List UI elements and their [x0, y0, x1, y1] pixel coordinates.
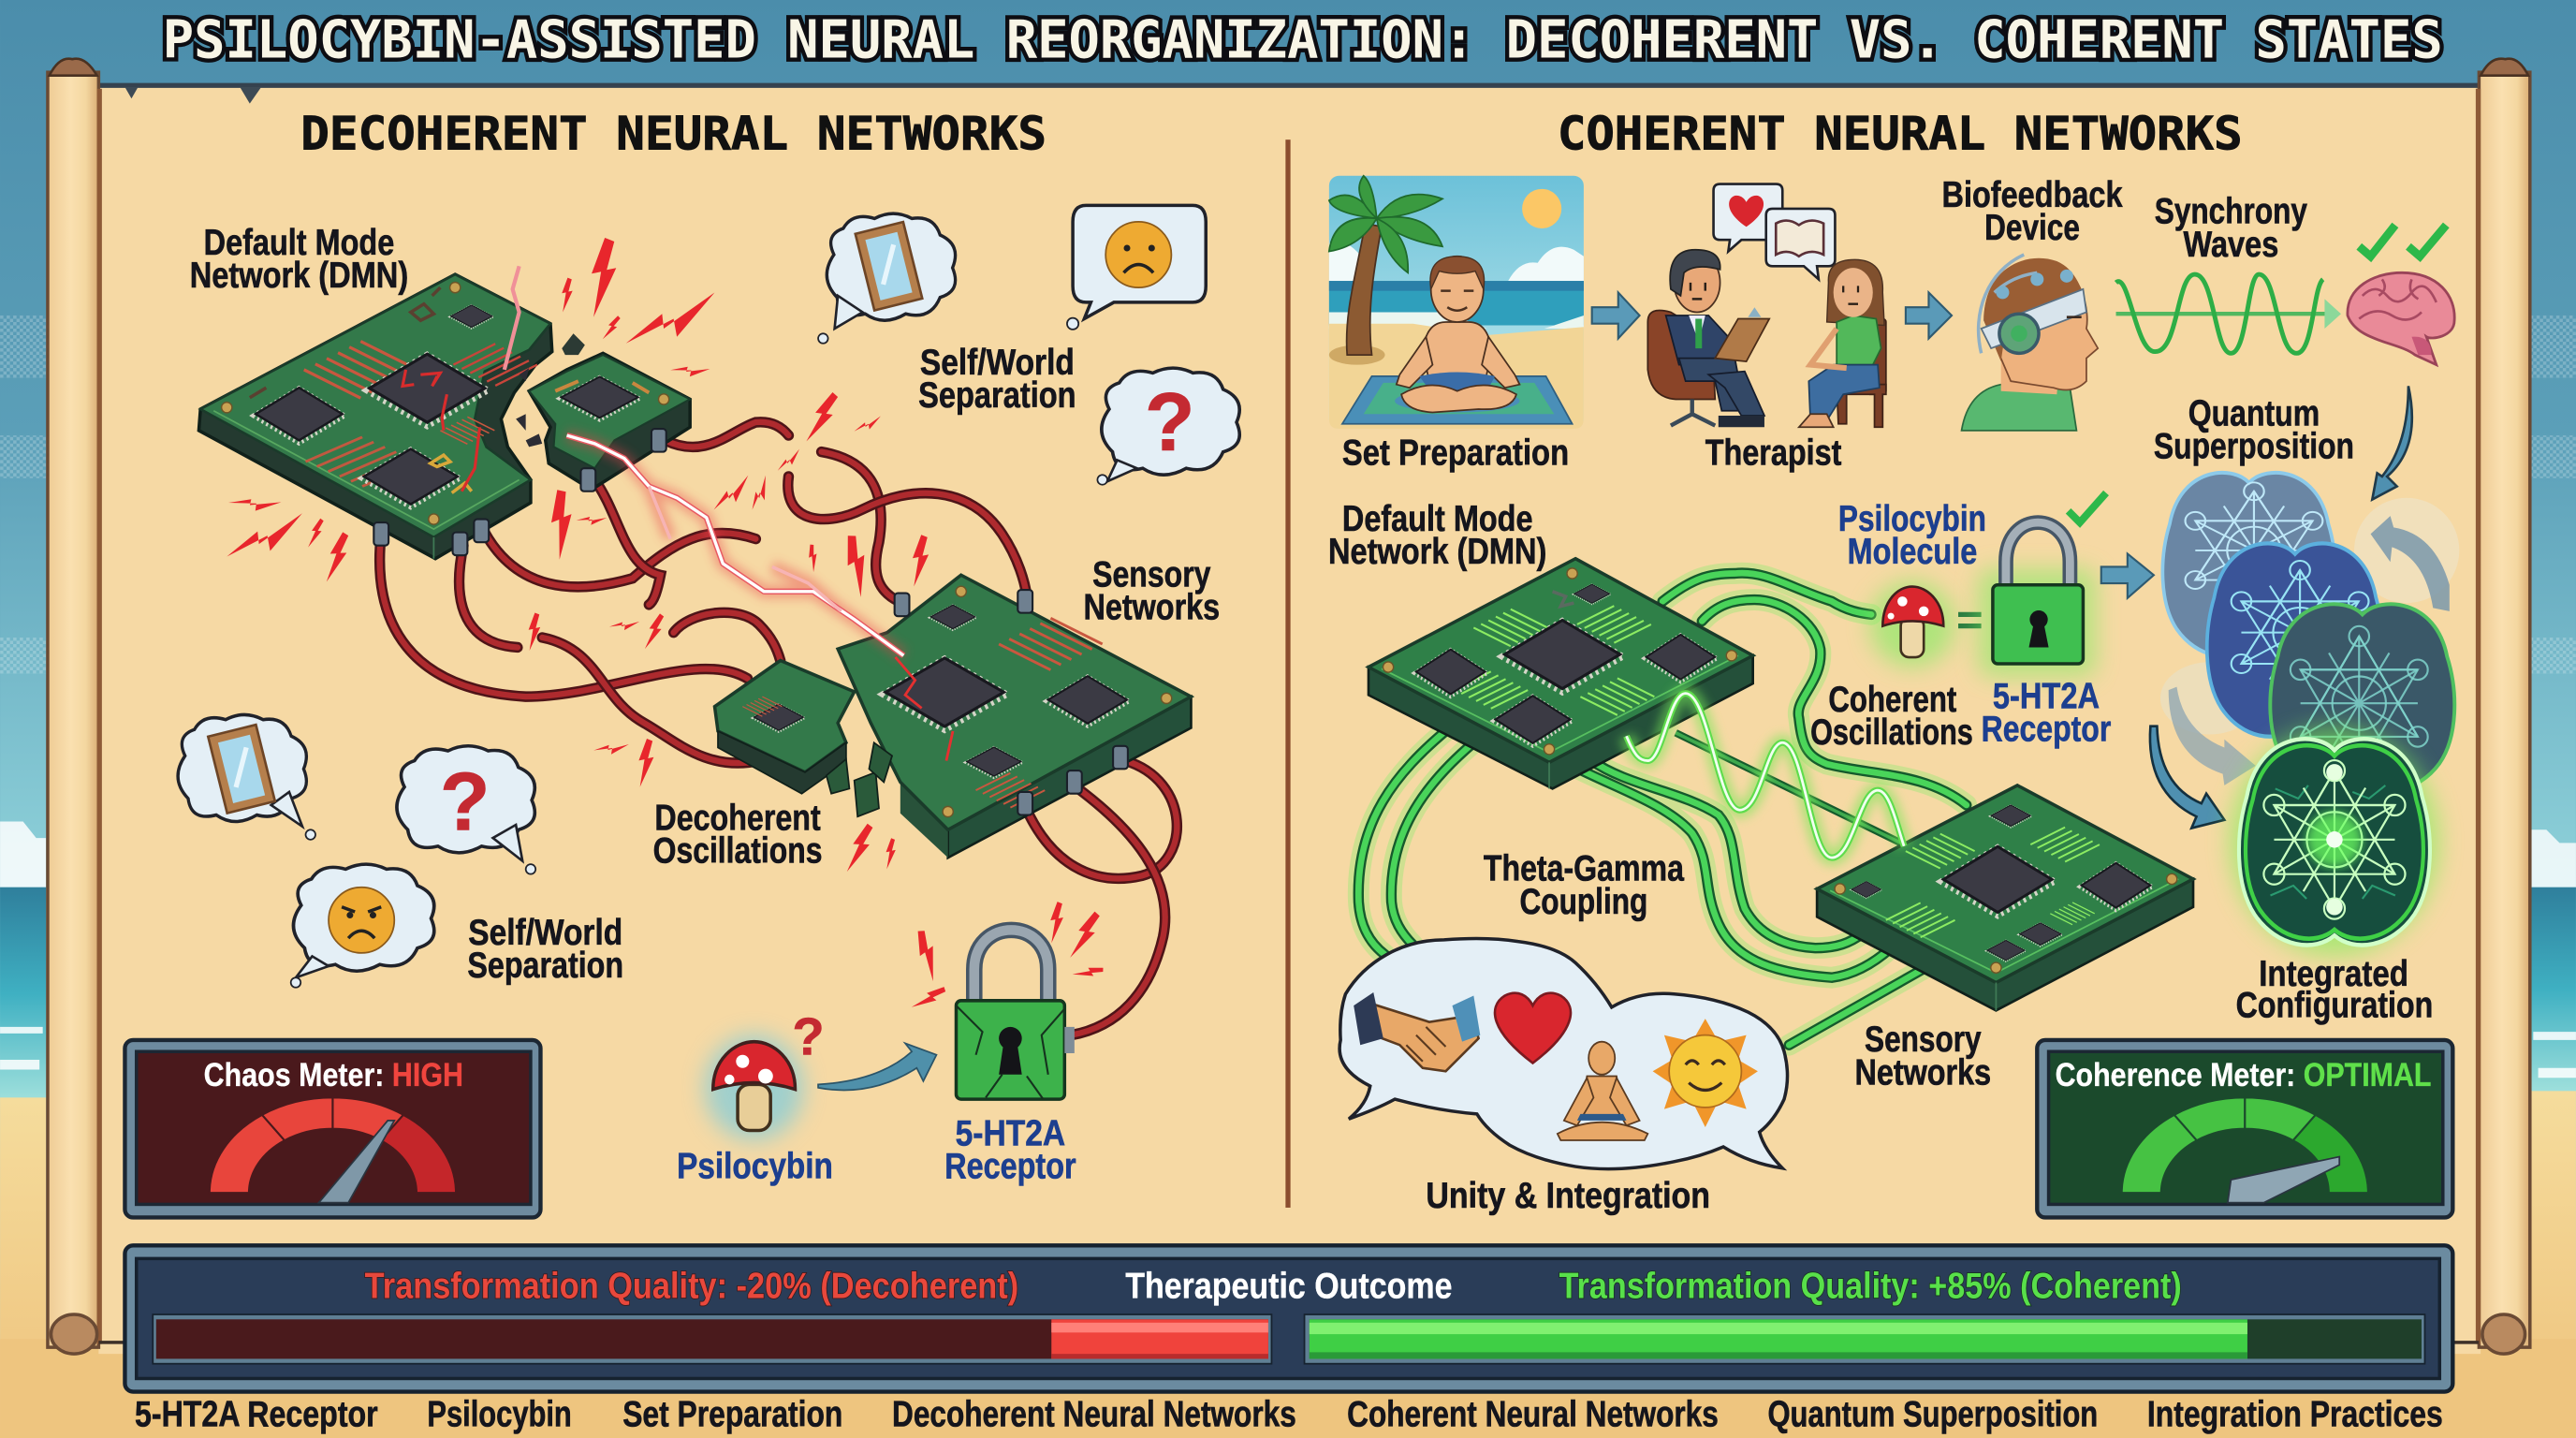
speech bubble: unity and integration: [1339, 938, 1788, 1169]
thought bubble: question mark: ?: [1145, 376, 1194, 468]
label: default mode network: [1328, 499, 1546, 572]
label: default mode network: Network (DMN): [190, 256, 408, 296]
label: default mode network: Network (DMN): [1328, 532, 1546, 572]
psilocybin mushroom: ?: [792, 1007, 825, 1066]
label: self/world separation, lower: Separation: [467, 946, 623, 986]
lock: 5-HT2A receptor open: [1978, 522, 2096, 677]
label: biofeedback device: [1942, 175, 2123, 248]
thought bubble: mirror, lower: [178, 714, 315, 840]
therapeutic outcome bar: [124, 1245, 2452, 1392]
label: default mode network: Default Mode: [1342, 499, 1532, 539]
label: sensory networks: [1854, 1020, 1991, 1093]
arrow: [1906, 292, 1952, 339]
label: 5-HT2A receptor: [1982, 676, 2111, 750]
thought bubble: question mark: [1097, 368, 1239, 485]
icon: green checks: [2359, 225, 2446, 257]
label: integrated configuration: [2236, 954, 2433, 1025]
icon: smiling sun: [1653, 1019, 1758, 1127]
meter label: Coherence Meter: OPTIMAL: [2056, 1057, 2431, 1093]
speech bubble: sad face: [1067, 205, 1206, 330]
bottom legend terms: Psilocybin: [427, 1394, 572, 1434]
coherent oscillation wave: [1627, 694, 1904, 858]
integrated configuration brain: [2230, 726, 2439, 956]
arrow: [2101, 553, 2154, 598]
gauge needle: [2228, 1157, 2339, 1203]
label: coherent oscillations: Coherent: [1828, 680, 1956, 720]
label: quantum superposition: [2154, 394, 2354, 467]
circuit board: sensory networks, broken: [714, 575, 1191, 858]
curved arrow to integrated brain: [2150, 726, 2224, 829]
label: psilocybin: Psilocybin: [677, 1146, 833, 1186]
center divider: [1285, 139, 1291, 1208]
arrow: [1592, 292, 1640, 339]
label: theta-gamma coupling: Coupling: [1519, 882, 1647, 922]
chart: synchrony wave: [2116, 274, 2341, 353]
thought bubble: question mark, lower: ?: [440, 756, 490, 847]
label: psilocybin molecule: [1838, 499, 1986, 572]
label: default mode network: [190, 223, 408, 296]
red sparks: [227, 238, 929, 875]
label: coherent oscillations: Oscillations: [1810, 712, 1973, 753]
red broken wires: [380, 422, 1177, 1035]
label: 5-HT2A receptor: Receptor: [944, 1146, 1076, 1186]
thought bubble: mirror: [818, 213, 956, 344]
label: self/world separation, lower: [467, 913, 623, 986]
panel: decoherent neural networks: [124, 107, 1239, 1217]
gauge needle: [319, 1121, 394, 1203]
illustration: set preparation beach meditation: [1329, 176, 1584, 429]
label: 5-HT2A receptor: Receptor: [1982, 710, 2111, 750]
label: self/world separation, top: Separation: [918, 375, 1076, 416]
panel: coherent neural networks: [1328, 107, 2459, 1217]
psilocybin mushroom: [705, 1007, 825, 1140]
bottom legend terms: Quantum Superposition: [1767, 1394, 2098, 1434]
quantum superposition brains: [2160, 473, 2459, 791]
label: synchrony waves: Waves: [2183, 225, 2278, 265]
progress bar: decoherent: [153, 1314, 1271, 1364]
mushroom, molecule: [1869, 581, 1982, 668]
label: coherent quality: Transformation Quality: +85% (Coherent): [1559, 1266, 2182, 1306]
meter label: Chaos Meter: HIGH: [204, 1057, 463, 1093]
circuit board: default mode network, intact: [1368, 559, 1753, 788]
circuit board: broken fragment: [516, 333, 690, 492]
title: PSILOCYBIN-ASSISTED NEURAL REORGANIZATION: DECOHERENT VS. COHERENT STATES: [163, 9, 2443, 70]
icon: handshake: [1354, 992, 1480, 1071]
label: self/world separation, top: [918, 343, 1076, 416]
bottom legend terms: 5-HT2A Receptor: [135, 1394, 378, 1434]
label: sensory networks: Sensory: [1092, 555, 1211, 595]
bottom legend terms: [135, 1394, 2443, 1434]
label: sensory networks: [1083, 555, 1220, 628]
label: integrated configuration: Configuration: [2236, 985, 2433, 1025]
label: self/world separation, lower: Self/World: [468, 913, 622, 953]
progress bar: coherent: [1305, 1314, 2424, 1364]
icon: meditating figure: [1558, 1042, 1647, 1140]
label: quantum superposition: Superposition: [2154, 427, 2354, 467]
bottom legend terms: Coherent Neural Networks: [1347, 1394, 1719, 1434]
label: biofeedback device: Biofeedback: [1942, 175, 2123, 215]
label: decoherent oscillations: Decoherent: [654, 798, 821, 838]
coherence meter: [2037, 1040, 2452, 1217]
circuit board: default mode network, broken: [198, 274, 552, 559]
label: self/world separation, top: Self/World: [920, 343, 1075, 383]
label: 5-HT2A receptor: 5-HT2A: [1993, 676, 2100, 716]
arrow: psilocybin to receptor: [818, 1043, 936, 1090]
lock: 5-HT2A receptor cracked: [910, 902, 1105, 1099]
bottom legend terms: Set Preparation: [622, 1394, 842, 1434]
label: sensory networks: Sensory: [1865, 1020, 1982, 1060]
curved arrow to quantum brains: [2372, 386, 2412, 500]
label: sensory networks: Networks: [1083, 588, 1220, 628]
label: 5-HT2A receptor: [944, 1113, 1076, 1186]
label: integrated configuration: Integrated: [2259, 954, 2408, 994]
bottom legend terms: Decoherent Neural Networks: [892, 1394, 1296, 1434]
lightning discharge between boards: [505, 266, 903, 655]
label: psilocybin molecule: Molecule: [1848, 532, 1977, 572]
label: biofeedback device: Device: [1984, 208, 2080, 248]
label: decoherent quality: Transformation Quality: -20% (Decoherent): [365, 1266, 1018, 1306]
label: sensory networks: Networks: [1854, 1052, 1991, 1093]
label: therapist: Therapist: [1705, 433, 1842, 474]
green wires: [1358, 573, 1967, 1045]
label: unity and integration: Unity & Integration: [1426, 1176, 1710, 1216]
icon: receptor check: [2069, 493, 2106, 522]
label: quantum superposition: Quantum: [2188, 394, 2320, 434]
heading: coherent: COHERENT NEURAL NETWORKS: [1558, 107, 2243, 161]
label: decoherent oscillations: [653, 798, 822, 871]
thought bubble: angry face: [291, 864, 434, 988]
label: set preparation: Set Preparation: [1342, 433, 1569, 474]
label: default mode network: Default Mode: [204, 223, 394, 263]
bottom legend terms: Integration Practices: [2147, 1394, 2443, 1434]
gauge arc: [2122, 1097, 2368, 1193]
heading: decoherent: DECOHERENT NEURAL NETWORKS: [300, 107, 1046, 161]
label: therapeutic outcome: Therapeutic Outcome: [1125, 1266, 1453, 1306]
label: synchrony waves: Synchrony: [2155, 192, 2307, 232]
label: decoherent oscillations: Oscillations: [653, 830, 822, 871]
icon: pink brain: [2348, 272, 2454, 365]
gauge arc: [210, 1097, 456, 1193]
icon: heart: [1495, 993, 1571, 1064]
label: theta-gamma coupling: Theta-Gamma: [1484, 849, 1684, 889]
illustration: therapist and patient: [1647, 184, 1886, 427]
label: theta-gamma coupling: [1484, 849, 1684, 922]
label: synchrony waves: [2155, 192, 2307, 265]
label: psilocybin molecule: Psilocybin: [1838, 499, 1986, 539]
label: coherent oscillations: [1810, 680, 1973, 753]
thought bubble: question mark, lower: [397, 746, 535, 874]
illustration: head with biofeedback device: [1962, 255, 2098, 431]
label: 5-HT2A receptor: 5-HT2A: [956, 1113, 1065, 1153]
circuit board: sensory networks, intact: [1817, 785, 2193, 1010]
chaos meter: [124, 1040, 540, 1217]
